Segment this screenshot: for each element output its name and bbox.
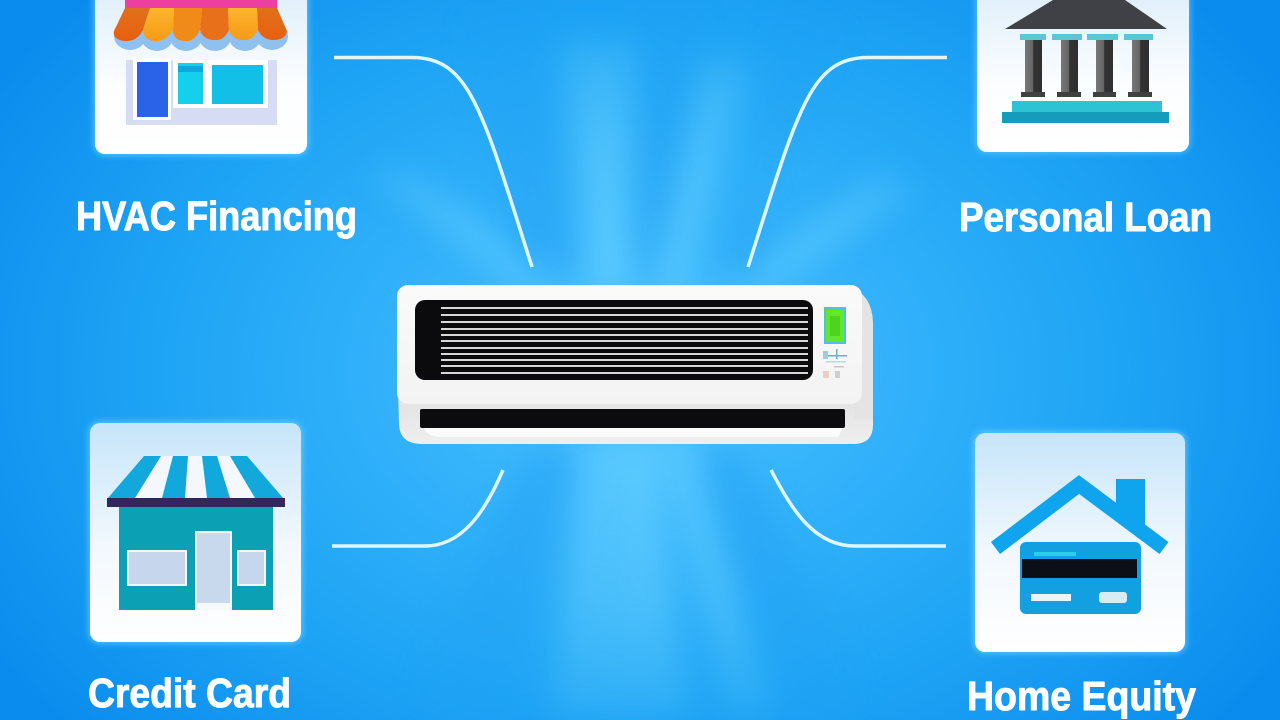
card [93, 0, 309, 156]
panel: HVAC Financing [76, 0, 357, 239]
display panel [824, 307, 846, 344]
icon: teal storefront with striped awning [107, 456, 285, 610]
card [975, 0, 1191, 154]
icon: bank building [1002, 0, 1169, 123]
connector: top left [334, 58, 532, 267]
connector: bottom left [332, 470, 503, 546]
lower air outlet [424, 428, 843, 437]
icon: house roof with credit card [996, 479, 1164, 614]
icon: storefront with orange awning [114, 0, 288, 125]
connector: bottom right [771, 470, 946, 546]
control markings [823, 349, 847, 378]
connector: top right [748, 58, 947, 267]
card [973, 431, 1187, 654]
panel: Personal Loan [959, 0, 1212, 240]
vent grille [415, 300, 813, 380]
card [88, 421, 303, 644]
label: Home Equity [967, 673, 1196, 719]
right side shading [850, 287, 873, 420]
lower housing [398, 385, 873, 444]
label: HVAC Financing [76, 193, 357, 239]
panel: Home Equity [967, 431, 1196, 719]
air conditioner unit [397, 285, 873, 444]
label: Credit Card [88, 670, 291, 716]
main front panel [397, 285, 862, 404]
label: Personal Loan [959, 194, 1212, 240]
panel: Credit Card [88, 421, 303, 716]
